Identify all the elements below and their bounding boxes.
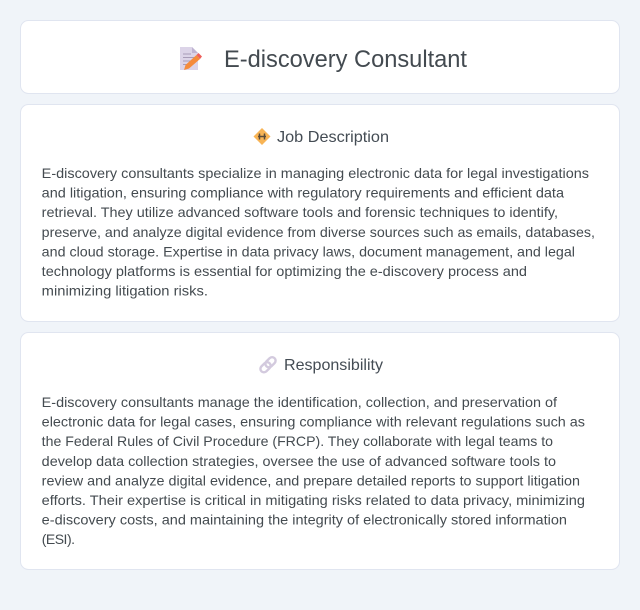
text block: responsibility: E-discovery consultants manage the identification, collection, and preservation of: [42, 394, 557, 410]
text block: responsibility: develop data collection strategies, oversee the use of advanced software tools to: [42, 453, 556, 469]
panel: responsibility: [20, 332, 620, 570]
panel: title: [20, 20, 620, 94]
text block: job description: retrieval. They utilize advanced software tools and forensic techniques to identify,: [42, 204, 558, 220]
text block: job description: [42, 165, 595, 299]
panel: job description: [20, 104, 620, 322]
text block: responsibility: the Federal Rules of Civil Procedure (FRCP). They collaborate with legal teams to: [42, 433, 553, 449]
text block: job description: and litigation, ensuring compliance with regulatory requirements and efficient data: [42, 185, 564, 201]
text block: job description: E-discovery consultants specialize in managing electronic data for legal investigations: [42, 165, 589, 181]
text block: job description: preserve, and analyze digital evidence from diverse sources such as emails, databases,: [42, 224, 595, 240]
text block: job description: minimizing litigation risks.: [42, 283, 208, 299]
icon: document with pencil: [180, 47, 202, 70]
text block: responsibility: electronic data for legal cases, ensuring compliance with relevant regulations such as: [42, 414, 585, 430]
heading: responsibility: Responsibility: [284, 357, 383, 374]
text block: responsibility: review and analyze digital evidence, and prepare detailed reports to support litigation: [42, 472, 580, 488]
icon: diamond sign: [254, 128, 270, 145]
text block: responsibility: [42, 394, 585, 547]
text block: job description: technology platforms is essential for optimizing the e-discovery process and: [42, 263, 527, 279]
title text: E-discovery Consultant: [224, 46, 467, 73]
text block: responsibility: efforts. Their expertise is critical in mitigating risks related to data privacy, minimizing: [42, 492, 585, 508]
icon: chain link: [259, 356, 277, 374]
heading: job description: Job Description: [277, 129, 389, 146]
text block: job description: and cloud storage. Expertise in data privacy laws, document management, and legal: [42, 243, 575, 259]
text block: responsibility: e-discovery costs, and maintaining the integrity of electronically stored information: [42, 512, 567, 528]
text block: responsibility: (ESI).: [42, 531, 75, 547]
